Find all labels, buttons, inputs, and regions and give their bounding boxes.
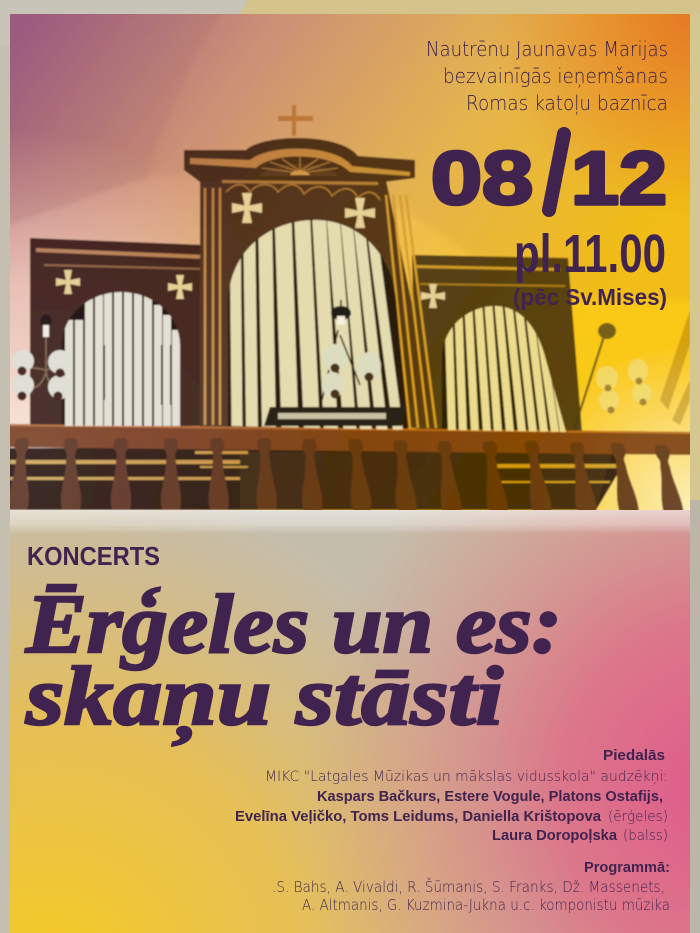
participants: Kaspars Bačkurs, Estere Vogule, Platons Ostafijs, xyxy=(317,789,663,805)
colour overlay xyxy=(0,0,700,520)
organ pipes centre xyxy=(235,215,398,430)
programme: .S. Bahs, A. Vivaldi, R. Šūmanis, S. Franks, Dž. Massenets, xyxy=(272,877,665,896)
location text: Romas katoļu baznīca xyxy=(466,91,668,115)
participants: Laura Doropoļska xyxy=(492,828,618,844)
panel: lower gradient xyxy=(10,510,690,933)
title: Ērģeles un es: xyxy=(25,578,562,671)
participants: MIKC "Latgales Mūzikas un mākslas vidusskola" audzēkņi: xyxy=(265,769,668,785)
organ right case xyxy=(412,255,582,432)
balusters xyxy=(8,438,685,517)
label: koncerts: KONCERTS xyxy=(27,541,160,571)
participants: (balss) xyxy=(623,828,668,844)
gallery top rail xyxy=(0,424,692,455)
chandelier centre xyxy=(322,300,381,400)
location text: bezvainīgās ieņemšanas xyxy=(443,64,668,88)
participants xyxy=(235,748,668,844)
date 08/12 xyxy=(431,134,667,220)
programme: Programmā: xyxy=(584,860,670,876)
gallery lower panels xyxy=(4,448,620,510)
time note: (pēc Sv.Mises) xyxy=(513,284,667,310)
organ central tower xyxy=(184,138,438,430)
chandelier left xyxy=(12,314,72,400)
cross xyxy=(278,105,313,136)
programme xyxy=(272,860,670,914)
programme: A. Altmanis, G. Kuzmina-Jukna u.c. komponistu mūzika xyxy=(302,896,670,914)
wall and vault xyxy=(0,0,700,520)
participants: (ērģeles) xyxy=(608,809,668,825)
location text: Nautrēnu Jaunavas Marijas xyxy=(426,37,668,61)
organ pipes right xyxy=(448,300,564,432)
location text xyxy=(426,37,668,115)
chandelier right xyxy=(574,323,652,430)
organ pipes left xyxy=(69,290,176,426)
gold column left xyxy=(205,188,220,425)
gold column right xyxy=(386,195,436,428)
title: skaņu stāsti xyxy=(25,650,503,746)
participants: Evelīna Veļičko, Toms Leidums, Daniella Krištopova xyxy=(235,809,602,825)
gold crosses on the case xyxy=(56,193,445,308)
music stand xyxy=(264,407,406,426)
title xyxy=(25,578,562,746)
panel: organ photograph with colour overlay xyxy=(0,0,700,520)
participants: Piedalās xyxy=(603,748,665,764)
date 08/12: 12 xyxy=(571,136,667,220)
date 08/12: 08 xyxy=(431,136,533,220)
organ left case xyxy=(30,238,205,426)
